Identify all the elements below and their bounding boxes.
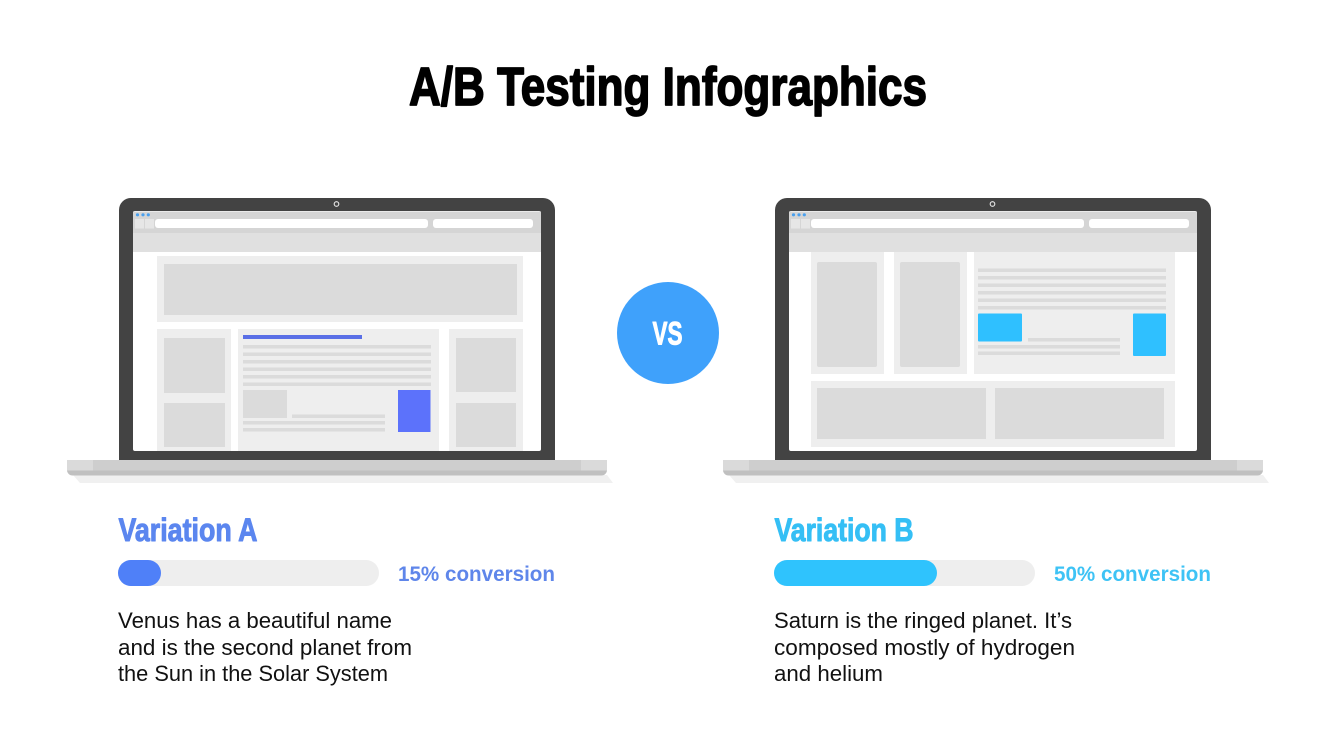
laptop A webcam — [334, 202, 339, 206]
description B — [774, 608, 1075, 686]
laptop B second column — [894, 252, 967, 374]
description A: Venus has a beautiful name — [118, 608, 392, 633]
description A: the Sun in the Solar System — [118, 661, 388, 686]
description A — [118, 608, 412, 686]
conversion label B: 50% conversion — [1054, 563, 1211, 586]
description A: and is the second planet from — [118, 635, 412, 660]
laptop B shadow — [729, 475, 1269, 483]
conversion label A: 15% conversion — [398, 563, 555, 586]
progress bar B — [774, 560, 1035, 586]
laptop A center article — [238, 329, 439, 451]
laptop A bezel — [119, 198, 555, 460]
VS badge — [617, 282, 719, 384]
laptop B screen — [789, 211, 1197, 451]
heading: Variation A: Variation A — [118, 512, 258, 548]
laptop B first column — [811, 252, 884, 374]
heading: Variation B: Variation B — [774, 512, 914, 548]
description B: composed mostly of hydrogen — [774, 635, 1075, 660]
description B: and helium — [774, 661, 883, 686]
panel: laptop B — [723, 198, 1269, 483]
laptop A hero block — [157, 256, 523, 322]
panel: laptop A — [67, 198, 613, 483]
laptop B webcam — [990, 202, 995, 206]
title: A/B Testing Infographics — [409, 57, 927, 117]
panel: variation A text — [118, 512, 555, 686]
laptop A left column — [157, 329, 231, 451]
progress bar A — [118, 560, 379, 586]
laptop B bottom blocks — [811, 381, 1175, 447]
laptop A shadow — [73, 475, 613, 483]
VS badge: VS — [652, 316, 682, 352]
laptop A right column — [449, 329, 523, 451]
laptop B bezel — [775, 198, 1211, 460]
laptop B article — [974, 252, 1175, 374]
laptop A browser bar — [133, 212, 541, 252]
laptop A base — [67, 460, 607, 476]
laptop B base — [723, 460, 1263, 476]
laptop A screen — [133, 211, 541, 451]
laptop B browser bar — [789, 212, 1197, 252]
description B: Saturn is the ringed planet. It’s — [774, 608, 1072, 633]
panel: variation B text — [774, 512, 1211, 686]
